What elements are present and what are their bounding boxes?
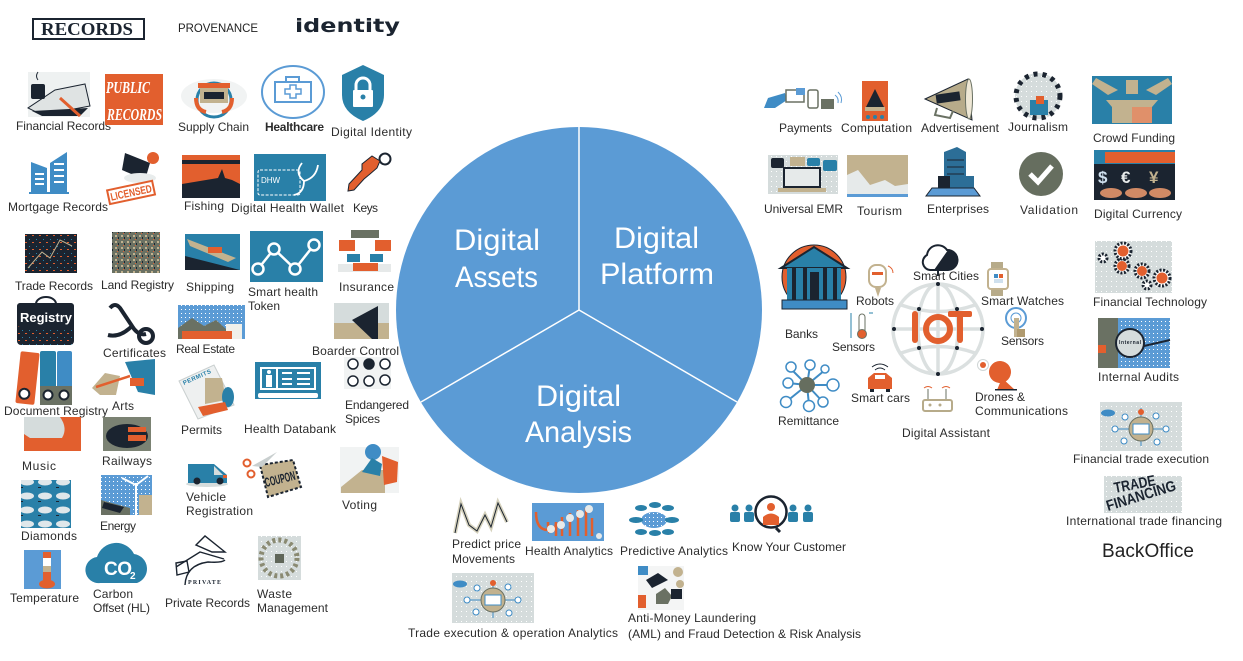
icon: gears with currency [1095, 241, 1172, 293]
label: Digital Identity [331, 125, 412, 139]
label: Predict price [452, 537, 521, 551]
panel: Digital Analysis items [408, 496, 861, 641]
label: Arts [112, 399, 134, 413]
item: Coupon [244, 452, 301, 497]
label: Fishing [184, 199, 224, 213]
item: Mortgage Records [8, 152, 108, 214]
icon: price chart [455, 503, 507, 533]
item: Arts [92, 359, 155, 413]
label: Payments [779, 121, 832, 135]
icon: trade financing headline: FINANCING [1104, 478, 1178, 515]
icon: registry briefcase: Registry [20, 310, 73, 325]
icon: land map [112, 232, 160, 273]
label: Insurance [339, 280, 394, 294]
icon: CO2 cloud [85, 543, 147, 583]
segment: Digital Assets: Digital [454, 224, 540, 257]
logo: PROVENANCE: PROVENANCE [178, 21, 258, 35]
label: Sensors [1001, 334, 1044, 348]
icon: Sydney opera scene [847, 155, 908, 197]
icon: voting box [340, 444, 399, 493]
icon: magnifier audit: Internal [1119, 340, 1142, 346]
item: Shipping [185, 234, 240, 294]
label: Keys [353, 201, 378, 215]
icon: coupon and scissors: COUPON [263, 468, 297, 490]
label: Computation [841, 121, 912, 135]
icon: magnified customer [730, 496, 813, 532]
item: Certificates [103, 305, 166, 360]
label: Certificates [103, 346, 166, 360]
label: Universal EMR [764, 202, 843, 216]
label: (AML) and Fraud Detection & Risk Analysis [628, 627, 861, 641]
item: Sensors left [832, 313, 875, 354]
icon: remittance network [780, 360, 839, 412]
label: Trade execution & operation Analytics [408, 626, 618, 640]
item: Land Registry [101, 232, 174, 292]
item: Banks [781, 245, 847, 341]
icon: office towers [29, 152, 69, 194]
label: Anti-Money Laundering [628, 611, 756, 625]
icon: key [348, 154, 390, 191]
item: Smart cars [851, 364, 910, 405]
item: Internal Audits [1098, 318, 1179, 384]
label: Private Records [165, 596, 250, 610]
label: Vehicle [186, 490, 226, 504]
icon: trade network [1100, 402, 1182, 451]
label: Real Estate [176, 342, 235, 356]
item: Predict price Movements [452, 503, 521, 566]
label: Token [248, 299, 280, 313]
icon: van [186, 464, 228, 487]
label: Management [257, 601, 329, 615]
item: Endangered Spices [344, 357, 409, 426]
item: Health Databank [244, 362, 337, 436]
item: Boarder Control [312, 303, 399, 358]
item: Keys [348, 154, 390, 215]
logo: RECORDS: RECORDS [41, 19, 133, 39]
item: Voting [340, 444, 399, 512]
label: Energy [100, 519, 136, 533]
label: Banks [785, 327, 818, 341]
item: Financial trade execution [1073, 402, 1209, 466]
label: Digital Assistant [902, 426, 991, 440]
label: Waste [257, 587, 292, 601]
item: Energy [100, 475, 152, 533]
icon: megaphone [925, 79, 972, 120]
icon: animal faces [344, 357, 391, 389]
label: Voting [342, 498, 377, 512]
item: Computation [841, 81, 912, 135]
label: Healthcare [265, 120, 324, 134]
item: Trade execution & operation Analytics [408, 573, 618, 640]
icon: health analytics chart [532, 503, 604, 541]
item: Document Registry [4, 351, 108, 418]
item: Know Your Customer [730, 496, 846, 554]
label: Financial trade execution [1073, 452, 1209, 466]
label: Movements [452, 552, 515, 566]
item: International trade financing [1066, 472, 1222, 528]
item: Trade Records [15, 234, 93, 293]
icon: wallet and stethoscope: DHW [261, 176, 281, 185]
label: Railways [102, 454, 152, 468]
item: Permits [179, 365, 234, 437]
icon: wind and solar [101, 475, 152, 515]
label: Enterprises [927, 202, 989, 216]
segment: Digital Platform: Platform [600, 258, 714, 291]
item: Waste Management [257, 536, 329, 615]
label: Temperature [10, 591, 79, 605]
icon: currency symbols: € [1121, 168, 1131, 187]
pie dividers [421, 127, 737, 402]
icon: currency symbols: ¥ [1149, 168, 1159, 187]
item: Universal EMR [764, 155, 843, 216]
item: Robots [856, 265, 894, 308]
label: Carbon [93, 587, 133, 601]
label: Smart Watches [981, 294, 1064, 308]
icon: certificate scroll [108, 305, 153, 343]
item: Healthcare [262, 66, 324, 134]
icon: public records card [105, 74, 163, 125]
item: IoT globe [892, 282, 984, 376]
icon: check badge [1019, 152, 1063, 196]
label: Predictive Analytics [620, 544, 728, 558]
icon: private records ship: PRIVATE [188, 580, 221, 586]
label: Health Databank [244, 422, 337, 436]
icon: satellite dish [978, 357, 1017, 390]
icon: medical case [262, 66, 324, 118]
item: Temperature [10, 550, 79, 605]
icon: smart health token [250, 231, 323, 282]
label: Journalism [1008, 120, 1068, 134]
icon: permits stamp: PERMITS [182, 369, 212, 387]
segment: Digital Platform: Digital [614, 222, 699, 255]
icon: supply chain [181, 79, 247, 117]
item: Smart Cities [913, 245, 979, 283]
icon: computation [862, 81, 888, 121]
item: Music [22, 417, 81, 473]
icon: train [103, 417, 151, 451]
icon: public records card: RECORDS [106, 105, 162, 124]
icon: music [24, 417, 81, 451]
segment: Digital Assets: Assets [455, 261, 538, 294]
icon: router [923, 386, 952, 411]
label: Spices [345, 412, 380, 426]
icon: houses [178, 305, 245, 339]
pie circle [396, 127, 762, 493]
label: Diamonds [21, 529, 77, 543]
central pie chart [396, 127, 762, 493]
item: Public Records [105, 74, 163, 125]
icon: insurance ring [338, 230, 391, 272]
item: Enterprises [926, 147, 989, 216]
label: Validation [1020, 203, 1078, 217]
icon: trade network [452, 573, 534, 623]
label: Permits [181, 423, 222, 437]
label: Endangered [345, 398, 409, 412]
label: Advertisement [921, 121, 1000, 135]
item: Health Analytics [525, 503, 613, 558]
icon: currency symbols [1094, 150, 1175, 200]
label: Health Analytics [525, 544, 613, 558]
icon: licensed stamp: LICENSED [109, 183, 153, 204]
item: Sensors right [1001, 308, 1044, 348]
label: Smart health [248, 285, 318, 299]
label: Remittance [778, 414, 839, 428]
icon: payment devices [764, 88, 842, 109]
icon: newspaper and coffee [28, 72, 90, 117]
label: Robots [856, 294, 894, 308]
item: Advertisement [921, 79, 1000, 135]
item: Payments [764, 88, 842, 135]
item: Digital Currency [1094, 150, 1182, 221]
icon: currency symbols: $ [1098, 168, 1108, 187]
panel: Digital Platform items [764, 73, 1222, 562]
icon: cloud [923, 245, 958, 276]
icon: CO2 cloud: CO [104, 559, 132, 580]
label: Boarder Control [312, 344, 399, 358]
item: Vehicle Registration [186, 464, 253, 518]
label: Internal Audits [1098, 370, 1179, 384]
item: Financial Records [16, 72, 111, 133]
icon: enterprise building [926, 147, 980, 196]
icon: waste circle [258, 536, 301, 580]
label: Smart cars [851, 391, 910, 405]
icon: EMR laptop [768, 155, 838, 194]
item: Licensed stamp [107, 152, 159, 204]
icon: thermometer card [24, 550, 61, 589]
header logos [33, 15, 401, 39]
label: Communications [975, 404, 1068, 418]
icon: CO2 cloud: 2 [130, 571, 136, 582]
item: Smart Watches [981, 262, 1064, 308]
logo: identity: identity [295, 15, 401, 37]
icon: thermometer [851, 313, 873, 338]
label: Tourism [857, 204, 902, 218]
label: Registration [186, 504, 253, 518]
item: Smart health Token [248, 231, 323, 313]
icon: trade financing headline: TRADE [1113, 472, 1157, 497]
icon: IoT globe [892, 282, 984, 376]
icon: border wall [334, 303, 389, 339]
item: Validation [1019, 152, 1078, 217]
label: Crowd Funding [1093, 131, 1175, 145]
label: Mortgage Records [8, 200, 108, 214]
item: Journalism [1008, 73, 1068, 134]
label: Shipping [186, 280, 234, 294]
item: Remittance [778, 360, 839, 428]
icon: bank building [781, 245, 847, 309]
icon: journalism collage [1015, 73, 1061, 119]
segment: Digital Analysis: Digital [536, 380, 621, 413]
label: Land Registry [101, 278, 174, 292]
segment: Digital Analysis: Analysis [525, 416, 632, 449]
item: Financial Technology [1093, 241, 1207, 309]
item: Insurance [338, 230, 394, 294]
icon: health databank [255, 362, 321, 399]
item: Private Records [165, 536, 250, 610]
icon: fishing boat at sunset [182, 155, 240, 198]
icon: predictive hub [629, 502, 679, 536]
item: Diamonds [21, 480, 77, 543]
label: Digital Health Wallet [231, 201, 345, 215]
label: Know Your Customer [732, 540, 846, 554]
item: Drones & Communications [975, 357, 1068, 418]
label: International trade financing [1066, 514, 1222, 528]
item: Tourism [847, 155, 908, 218]
label: Drones & [975, 390, 1025, 404]
label: Trade Records [15, 279, 93, 293]
label: Music [22, 459, 56, 473]
label: Financial Technology [1093, 295, 1207, 309]
label: Document Registry [4, 404, 108, 418]
label: Smart Cities [913, 269, 979, 283]
item: Digital Assistant [902, 386, 991, 440]
label: Sensors [832, 340, 875, 354]
item: Digital Health Wallet [231, 154, 345, 215]
icon: robot device [869, 265, 893, 297]
icon: smart watch [988, 262, 1008, 296]
icon: painting hand [92, 359, 155, 395]
item: Fishing [182, 155, 240, 213]
icon: hands over box [1092, 76, 1172, 124]
item: Predictive Analytics [620, 502, 728, 558]
label: Digital Currency [1094, 207, 1182, 221]
label: Offset (HL) [93, 601, 150, 615]
icon: touch sensor [1006, 308, 1026, 337]
icon: connected car [868, 364, 892, 392]
icon: shield padlock [342, 65, 384, 121]
label: Supply Chain [178, 120, 249, 134]
item: Digital Identity [331, 65, 412, 139]
icon: trading chart [25, 234, 77, 273]
icon: public records card: PUBLIC [105, 78, 150, 97]
item: Registry [17, 297, 74, 345]
label: Financial Records [16, 119, 111, 133]
icon: diamonds [21, 480, 71, 528]
icon: container ship [185, 234, 240, 270]
panel: Digital Assets items [4, 65, 412, 615]
item: AML and Fraud Detection [628, 566, 861, 641]
logo: BackOffice: BackOffice [1102, 541, 1194, 562]
icon: binders [15, 351, 72, 405]
item: Supply Chain [178, 79, 249, 134]
item: Railways [102, 417, 152, 468]
item: Carbon Offset [85, 543, 150, 615]
icon: money laundering collage [638, 566, 684, 610]
item: Real Estate [176, 305, 245, 356]
item: Crowd Funding [1092, 76, 1175, 145]
